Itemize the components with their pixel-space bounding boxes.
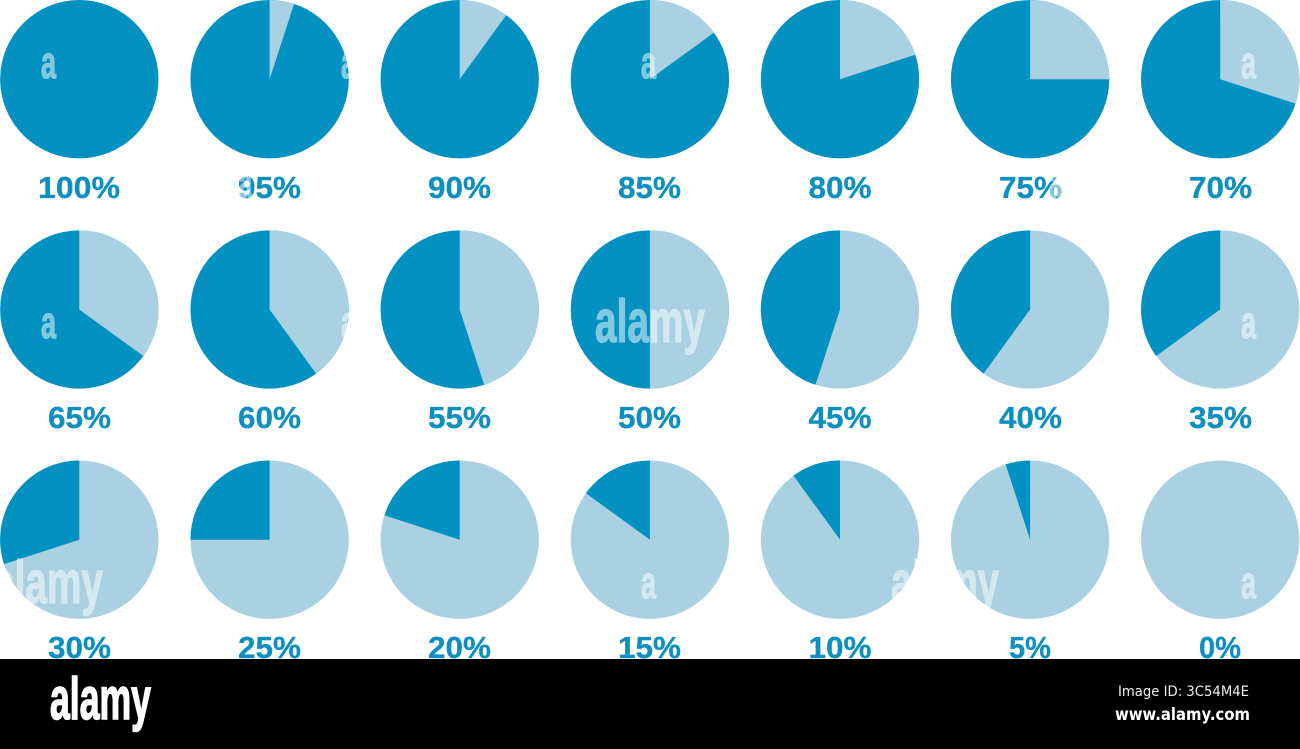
watermark overlays [41,37,1257,616]
watermark: centre alamy: alamy [595,288,705,355]
label: 35%: 35% [1189,400,1252,435]
label: 20%: 20% [428,630,491,665]
label: 95%: 95% [238,170,301,205]
footer: image id: Image ID: 3C54M4E [1118,684,1249,700]
pie: 70% [1141,0,1299,158]
watermark overlays: a [1241,557,1257,608]
pie: 75% [951,0,1109,158]
label: 80%: 80% [808,170,872,205]
watermark overlays: a [341,297,357,348]
pie: 55% [381,230,539,389]
label: 0%: 0% [1199,630,1241,665]
label: 65%: 65% [48,400,111,435]
watermark overlays: a [341,37,357,88]
footer logo: alamy: alamy [50,666,151,732]
label: 30%: 30% [48,630,111,665]
pie: 40% [951,230,1109,389]
label: 60%: 60% [238,400,301,435]
footer: website: www.alamy.com [1115,705,1250,724]
label: 75%: 75% [999,170,1062,205]
label: 45%: 45% [808,400,872,435]
label: 15%: 15% [618,630,681,665]
label: 50%: 50% [618,400,681,435]
pie: 65% [0,230,158,389]
watermark overlays: alamy [891,549,999,616]
label: 10%: 10% [808,630,872,665]
pie: 30% [0,461,158,619]
pie: 85% [571,0,729,158]
pie: 0% [1141,461,1299,619]
pie: 5% [951,461,1109,619]
label: 55%: 55% [428,400,491,435]
label: 40%: 40% [999,400,1062,435]
watermark overlays: a [41,297,57,348]
pie: 60% [190,230,349,389]
watermark overlays: a [1241,297,1257,348]
watermark overlays: a [41,37,57,88]
pie: 35% [1141,230,1299,389]
pie: 90% [381,0,539,158]
pie: 45% [761,230,919,389]
pie: 20% [381,461,539,619]
watermark overlays: a [239,157,253,208]
watermark overlays: a [641,557,657,608]
footer bar [0,659,1300,749]
label: 70%: 70% [1189,170,1252,205]
label: 5%: 5% [1009,630,1051,665]
watermark overlays: a [641,37,657,88]
pie: 50% [571,230,729,389]
label: 85%: 85% [618,170,681,205]
pie: 80% [761,0,919,158]
pie: 25% [190,461,349,619]
watermark overlays: a [1241,37,1257,88]
pie: 100% [0,0,158,158]
label: 90%: 90% [428,170,491,205]
label: 25%: 25% [238,630,301,665]
label: 100%: 100% [38,170,120,205]
pie: 95% [190,0,349,158]
pie: 10% [761,461,919,619]
watermark overlays: a [1049,157,1063,208]
pie: 15% [571,461,729,619]
